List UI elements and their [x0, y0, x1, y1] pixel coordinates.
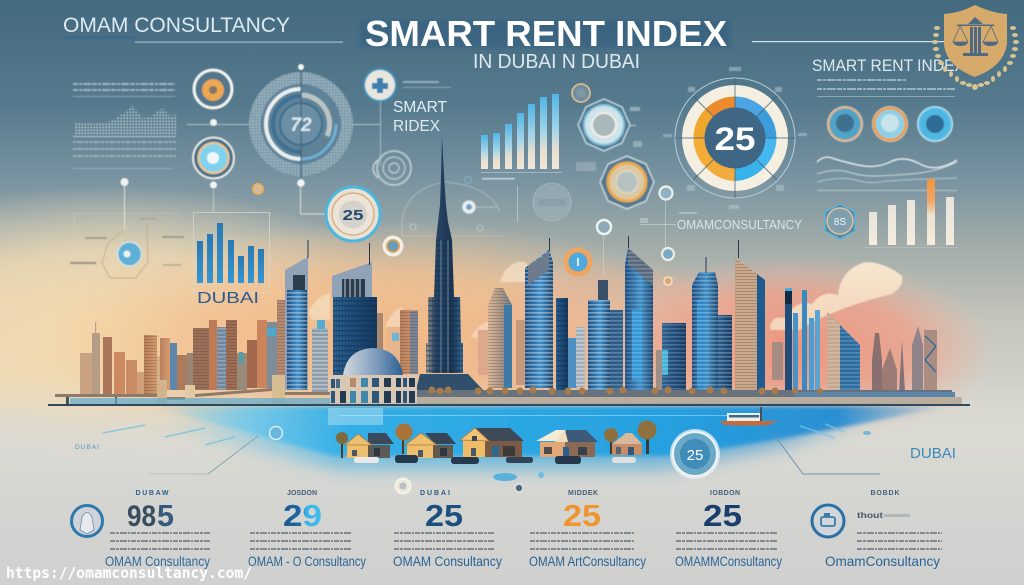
bridge	[55, 375, 330, 405]
main title: IN DUBAI N DUBAI	[473, 50, 640, 73]
network diagram	[70, 178, 184, 281]
stat column 6	[812, 490, 942, 569]
side label: smart ridex: SMART	[393, 99, 448, 116]
stat column 4: 25	[563, 498, 601, 533]
watermark label: omam consultancy: OMAMCONSULTANCY	[677, 217, 802, 232]
stat column 2: 29	[283, 498, 322, 533]
stat column 3	[393, 490, 502, 569]
faint circle badge	[517, 183, 571, 222]
stat column 5	[675, 490, 782, 569]
icon: person ring	[72, 506, 102, 536]
skyline: domed building	[329, 348, 417, 404]
scales of justice	[953, 17, 998, 56]
map labels	[75, 444, 956, 494]
octagon dial upper	[578, 99, 642, 151]
stat column 1: 5	[157, 498, 174, 533]
stat column 2	[248, 490, 366, 569]
house 1	[345, 433, 394, 458]
bar chart: Dubai: DUBAI	[197, 290, 259, 307]
stat column 6: thout	[857, 510, 883, 520]
badge: 25 on water: 25	[687, 447, 703, 464]
icon: cyan ring	[193, 138, 234, 178]
dial: 72 gauge	[249, 64, 353, 187]
Burj orbit annotation	[402, 176, 515, 236]
icon: orange coin ring	[194, 70, 232, 108]
stat column 1: 98	[127, 500, 156, 533]
connector badges	[597, 186, 674, 285]
stat column 5: OMAMMConsultancy	[675, 553, 782, 569]
donut chart: 25	[714, 121, 756, 157]
stat column 6: BOBDK	[870, 490, 900, 497]
connector lines and big dial	[187, 64, 381, 214]
stat column 5: 25	[703, 498, 742, 533]
promenade with trees	[417, 386, 962, 404]
left area chart panel	[73, 84, 176, 169]
main title	[360, 13, 947, 73]
boat	[720, 407, 778, 426]
skyline: central right towers	[478, 236, 765, 390]
hex gauge: 8S: 8S	[834, 217, 846, 228]
skyline: central left towers	[285, 240, 418, 392]
right panel heading: SMART RENT INDEX	[812, 57, 965, 75]
three metric rings	[827, 106, 953, 142]
side label: smart ridex: RIDEX	[393, 118, 441, 135]
stat column 1: OMAM Consultancy	[105, 553, 210, 569]
map labels: DUBAI	[75, 444, 99, 451]
stat column 1	[72, 490, 210, 569]
parked cars	[354, 455, 636, 464]
icon: medical plus badge	[364, 69, 451, 101]
skyline: right towers	[772, 288, 937, 394]
stat column 6: OmamConsultancy	[825, 553, 940, 569]
stat column 3: OMAM Consultancy	[393, 553, 502, 569]
stat column 2: OMAM - O Consultancy	[248, 553, 366, 569]
donut chart	[675, 78, 795, 198]
house 4	[536, 430, 598, 457]
stat column 1: DUBAW	[136, 490, 169, 497]
laurel wreath	[932, 26, 1019, 90]
faint spiral badge	[373, 151, 411, 185]
small orange dial	[572, 84, 590, 102]
small orange token	[252, 184, 264, 194]
watermark label: omam consultancy	[640, 212, 802, 232]
palm trees	[336, 420, 656, 458]
badge: 25	[326, 187, 380, 241]
stat column 2: JOSDON	[287, 490, 317, 497]
stat column 3: 25	[425, 498, 463, 533]
main title: SMART RENT INDEX	[365, 13, 727, 54]
stat column 4: MIDDEK	[568, 490, 598, 497]
clouds	[308, 262, 903, 340]
tower B	[332, 243, 377, 375]
stat column 4: OMAM ArtConsultancy	[529, 553, 646, 569]
bar chart: Dubai	[194, 212, 270, 307]
shield logo	[932, 5, 1019, 90]
icon: device ring	[812, 505, 844, 537]
map labels: DUBAI	[910, 446, 956, 462]
house 3	[460, 428, 524, 457]
octagon dial lower	[576, 156, 654, 209]
stat column 4	[529, 490, 646, 569]
dial: 72 gauge: 72	[290, 115, 312, 136]
orange token with blue core	[564, 248, 592, 276]
header: company name: OMAM CONSULTANCY	[63, 13, 290, 37]
skyline: Burj tower	[416, 135, 483, 390]
badge: 25: 25	[342, 207, 364, 224]
side label: smart ridex	[393, 99, 448, 135]
stat column 5: IOBDON	[710, 490, 740, 497]
badge: 25 on water	[670, 429, 720, 479]
house 5	[612, 433, 642, 455]
right panel heading	[812, 57, 965, 97]
houses	[336, 420, 656, 464]
website url: https://omamconsultancy.com/	[6, 564, 252, 582]
skyline: distant towers left	[80, 300, 287, 394]
bar chart: cream columns with orange peak	[865, 179, 958, 248]
tower A	[285, 240, 308, 390]
hex gauge: 8S	[825, 204, 855, 239]
water	[103, 406, 950, 481]
bar chart: cream and blue columns	[481, 94, 562, 173]
waterline	[48, 404, 970, 406]
donut tick labels	[663, 67, 807, 209]
small badge near Burj	[382, 236, 404, 256]
stat column 3: DUBAI	[420, 490, 450, 497]
house 2	[405, 433, 456, 458]
line chart	[817, 157, 957, 190]
